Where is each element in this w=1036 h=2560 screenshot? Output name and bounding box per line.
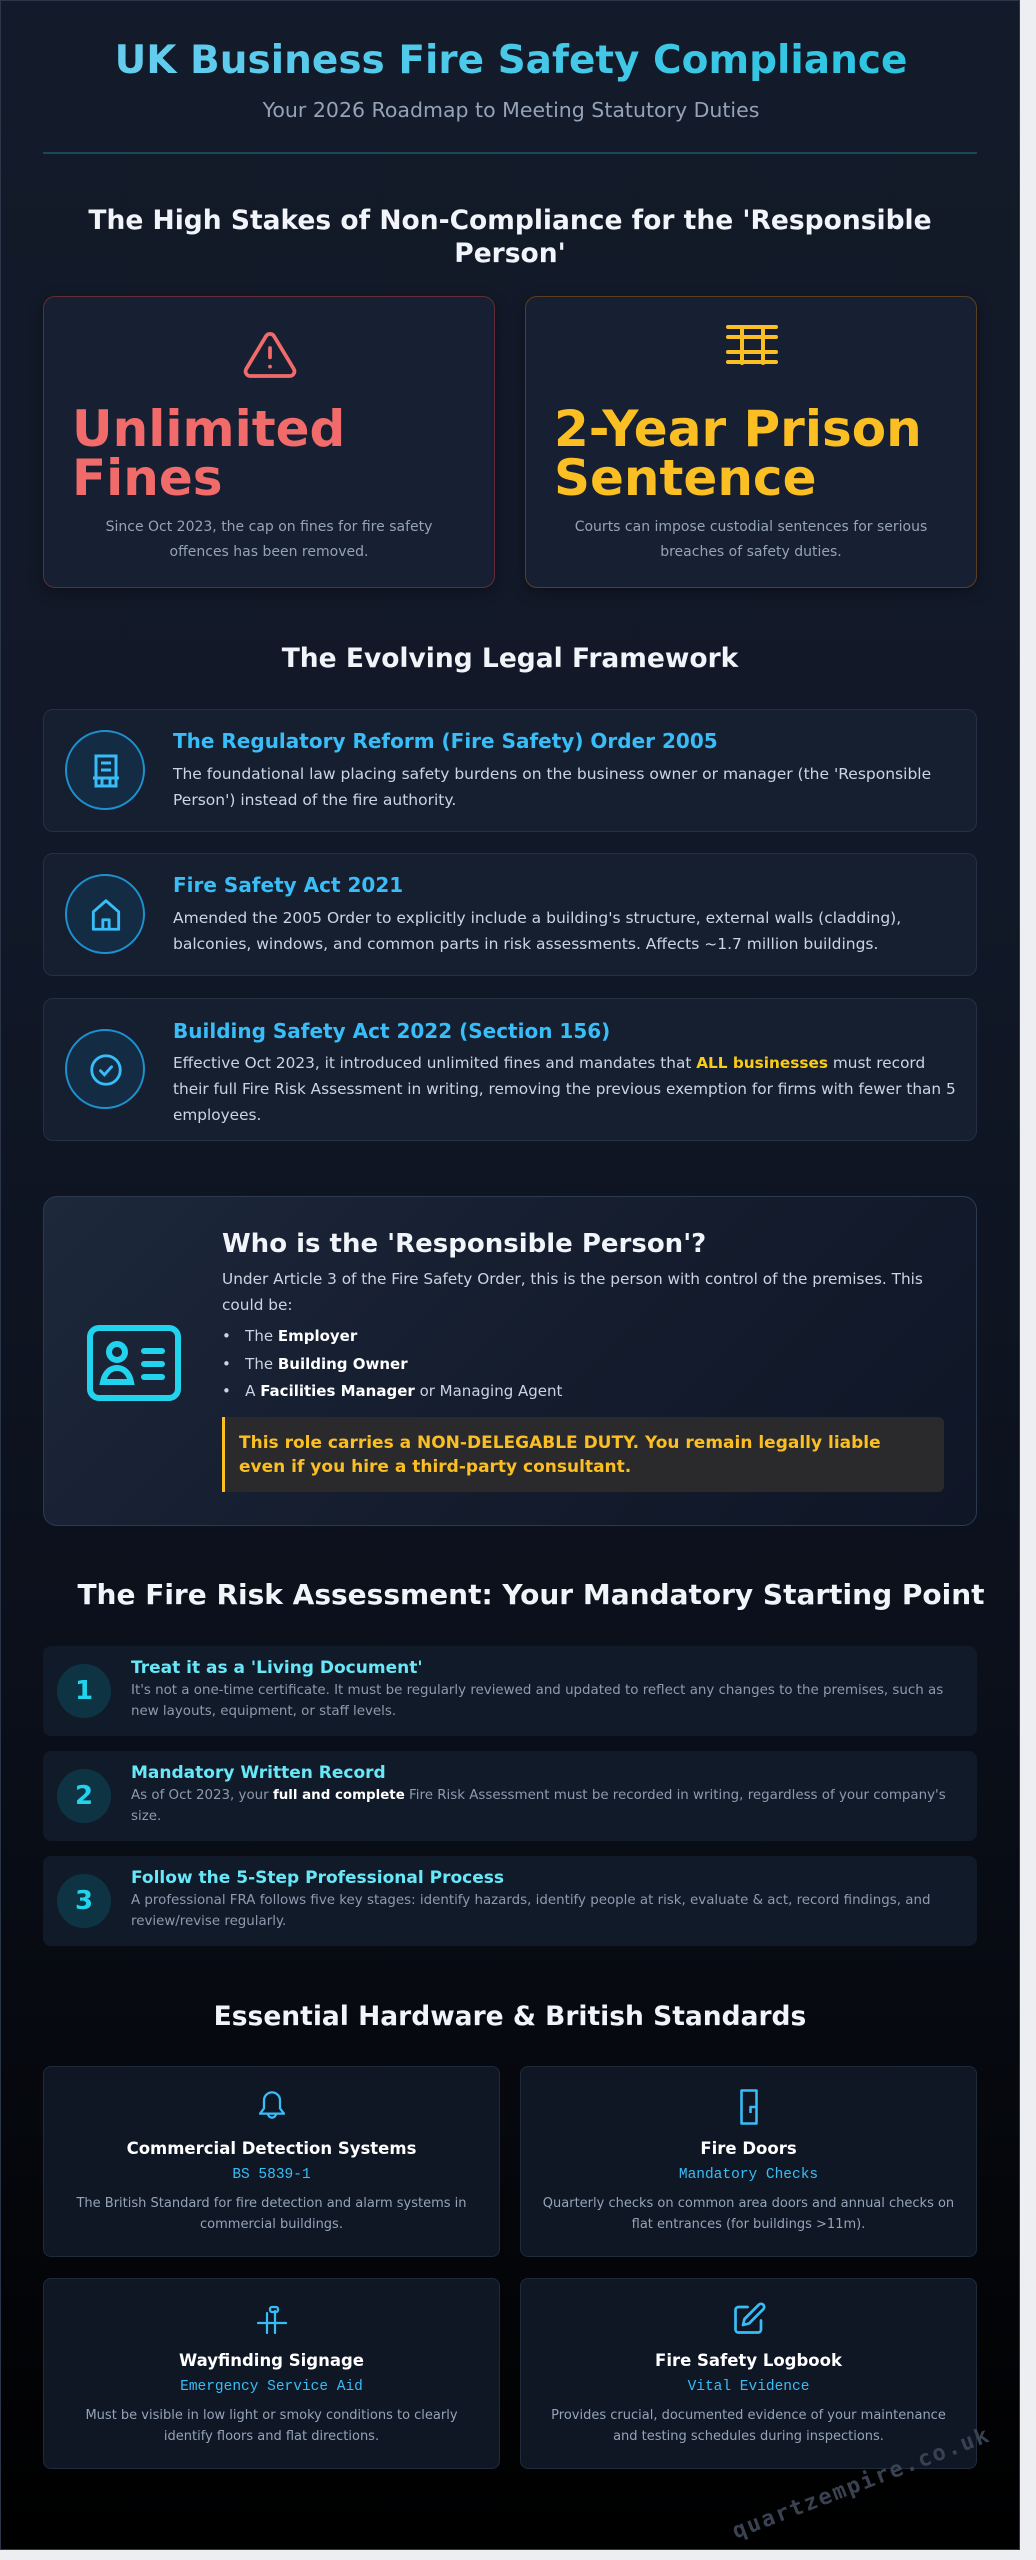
- list: candidates: [222, 1327, 562, 1400]
- card: fire doors: Mandatory Checks: [679, 2167, 818, 2183]
- card: detection: The British Standard for fire detection and alarm systems in commercial buildings.: [76, 2196, 467, 2232]
- step 2: 2: [75, 1781, 93, 1811]
- icon: id card: [87, 1325, 181, 1401]
- step 1: Treat it as a 'Living Document': [131, 1658, 423, 1678]
- icon: door: [740, 2089, 758, 2125]
- heading: fire risk assessment: The Fire Risk Assessment: Your Mandatory Starting Point: [77, 1578, 985, 1611]
- panel: unlimited fines: [43, 296, 495, 588]
- step 3: [43, 1856, 977, 1946]
- icon: edit: [734, 2302, 766, 2334]
- card: detection: [43, 2066, 500, 2257]
- stat: unlimited fines: Unlimited: [72, 400, 345, 458]
- callout: non-delegable duty: This role carries a NON-DELEGABLE DUTY. You remain legally liable even if you hire a third-party consultant.: [239, 1433, 881, 1477]
- title: UK Business Fire Safety Compliance: [115, 38, 907, 83]
- icon: check circle: [65, 1029, 145, 1109]
- subtitle: Your 2026 Roadmap to Meeting Statutory Duties: [263, 98, 759, 122]
- card: signage: Must be visible in low light or smoky conditions to clearly identify floors and flat directions.: [85, 2408, 458, 2444]
- card: detection: Commercial Detection Systems: [127, 2139, 416, 2158]
- body: The foundational law placing safety burdens on the business owner or manager (the 'Responsible Person') instead of the fire authority.: [173, 765, 931, 809]
- heading: Who is the 'Responsible Person'?: [222, 1229, 706, 1259]
- list: candidates: • The Employer: [222, 1327, 357, 1345]
- step 1: [43, 1646, 977, 1736]
- body: Effective Oct 2023, it introduced unlimited fines and mandates that ALL businesses must record: [173, 1054, 925, 1072]
- list: candidates: • The Building Owner: [222, 1354, 408, 1372]
- step 1: 1: [75, 1676, 93, 1706]
- panel: FSA 2021: [43, 853, 977, 976]
- stat: unlimited fines: [72, 400, 345, 507]
- stat: prison sentence: [554, 400, 922, 507]
- card: logbook: Provides crucial, documented evidence of your maintenance and testing schedules during inspections.: [551, 2408, 946, 2444]
- callout: non-delegable duty: [222, 1417, 944, 1492]
- text: fines description: Since Oct 2023, the cap on fines for fire safety offences has been removed.: [106, 519, 432, 560]
- step 2: As of Oct 2023, your full and complete Fire Risk Assessment must be recorded in writing, regardless of your company's size.: [131, 1788, 946, 1824]
- card: logbook: Vital Evidence: [688, 2379, 809, 2395]
- icon: house: [65, 874, 145, 954]
- heading: hardware: Essential Hardware & British Standards: [214, 2001, 806, 2032]
- card: logbook: [520, 2278, 977, 2469]
- text: prison description: Courts can impose custodial sentences for serious breaches of safety duties.: [575, 519, 927, 560]
- card: logbook: Fire Safety Logbook: [655, 2351, 842, 2370]
- icon: prison bars: [726, 325, 778, 365]
- step 2: [43, 1751, 977, 1841]
- icon: building: [65, 730, 145, 810]
- stat: prison sentence: Sentence: [554, 449, 816, 507]
- card: fire doors: [520, 2066, 977, 2257]
- title: Building Safety Act 2022 (Section 156): [173, 1019, 610, 1043]
- card: signage: [43, 2278, 500, 2469]
- title: The Regulatory Reform (Fire Safety) Order 2005: [173, 729, 718, 753]
- panel: prison sentence: [525, 296, 977, 588]
- card: fire doors: Quarterly checks on common area doors and annual checks on flat entrances (for buildings >11m).: [543, 2196, 954, 2232]
- title: Fire Safety Act 2021: [173, 873, 403, 897]
- icon: warning triangle: [244, 332, 296, 378]
- panel: RRO 2005: [43, 709, 977, 832]
- card: signage: Wayfinding Signage: [179, 2351, 364, 2370]
- panel: responsible person: [43, 1196, 977, 1526]
- body: their full Fire Risk Assessment in writing, removing the previous exemption for firms with fewer than 5 employees.: [173, 1080, 956, 1124]
- card: detection: BS 5839-1: [232, 2167, 311, 2183]
- stat: prison sentence: 2-Year Prison: [554, 400, 922, 458]
- card: signage: Emergency Service Aid: [180, 2379, 363, 2395]
- list: candidates: • A Facilities Manager or Managing Agent: [222, 1382, 562, 1400]
- heading: high stakes: The High Stakes of Non-Compliance for the 'Responsible Person': [88, 205, 932, 269]
- step 3: 3: [75, 1886, 93, 1916]
- step 3: Follow the 5-Step Professional Process: [131, 1868, 504, 1888]
- watermark: quartzempire.co.uk: [729, 2423, 994, 2544]
- step 1: It's not a one-time certificate. It must be regularly reviewed and updated to reflect any changes to the premises, such as new layouts, equipment, or staff levels.: [131, 1683, 943, 1719]
- text: intro: Under Article 3 of the Fire Safety Order, this is the person with control of the premises. This could be:: [222, 1270, 923, 1314]
- step 2: Mandatory Written Record: [131, 1763, 386, 1783]
- panel: BSA 2022: [43, 998, 977, 1141]
- heading: legal framework: The Evolving Legal Framework: [282, 643, 738, 674]
- card: fire doors: Fire Doors: [700, 2139, 797, 2158]
- stat: unlimited fines: Fines: [72, 449, 223, 507]
- body: Amended the 2005 Order to explicitly include a building's structure, external walls (cladding), balconies, windows, and common parts in risk assessments. Affects ~1.7 million buildings.: [173, 909, 901, 953]
- icon: signpost: [256, 2306, 288, 2334]
- step 3: A professional FRA follows five key stages: identify hazards, identify people at risk, evaluate & act, record findings, and review/revise regularly.: [131, 1893, 930, 1929]
- icon: bell: [258, 2091, 286, 2119]
- body: [173, 1054, 956, 1124]
